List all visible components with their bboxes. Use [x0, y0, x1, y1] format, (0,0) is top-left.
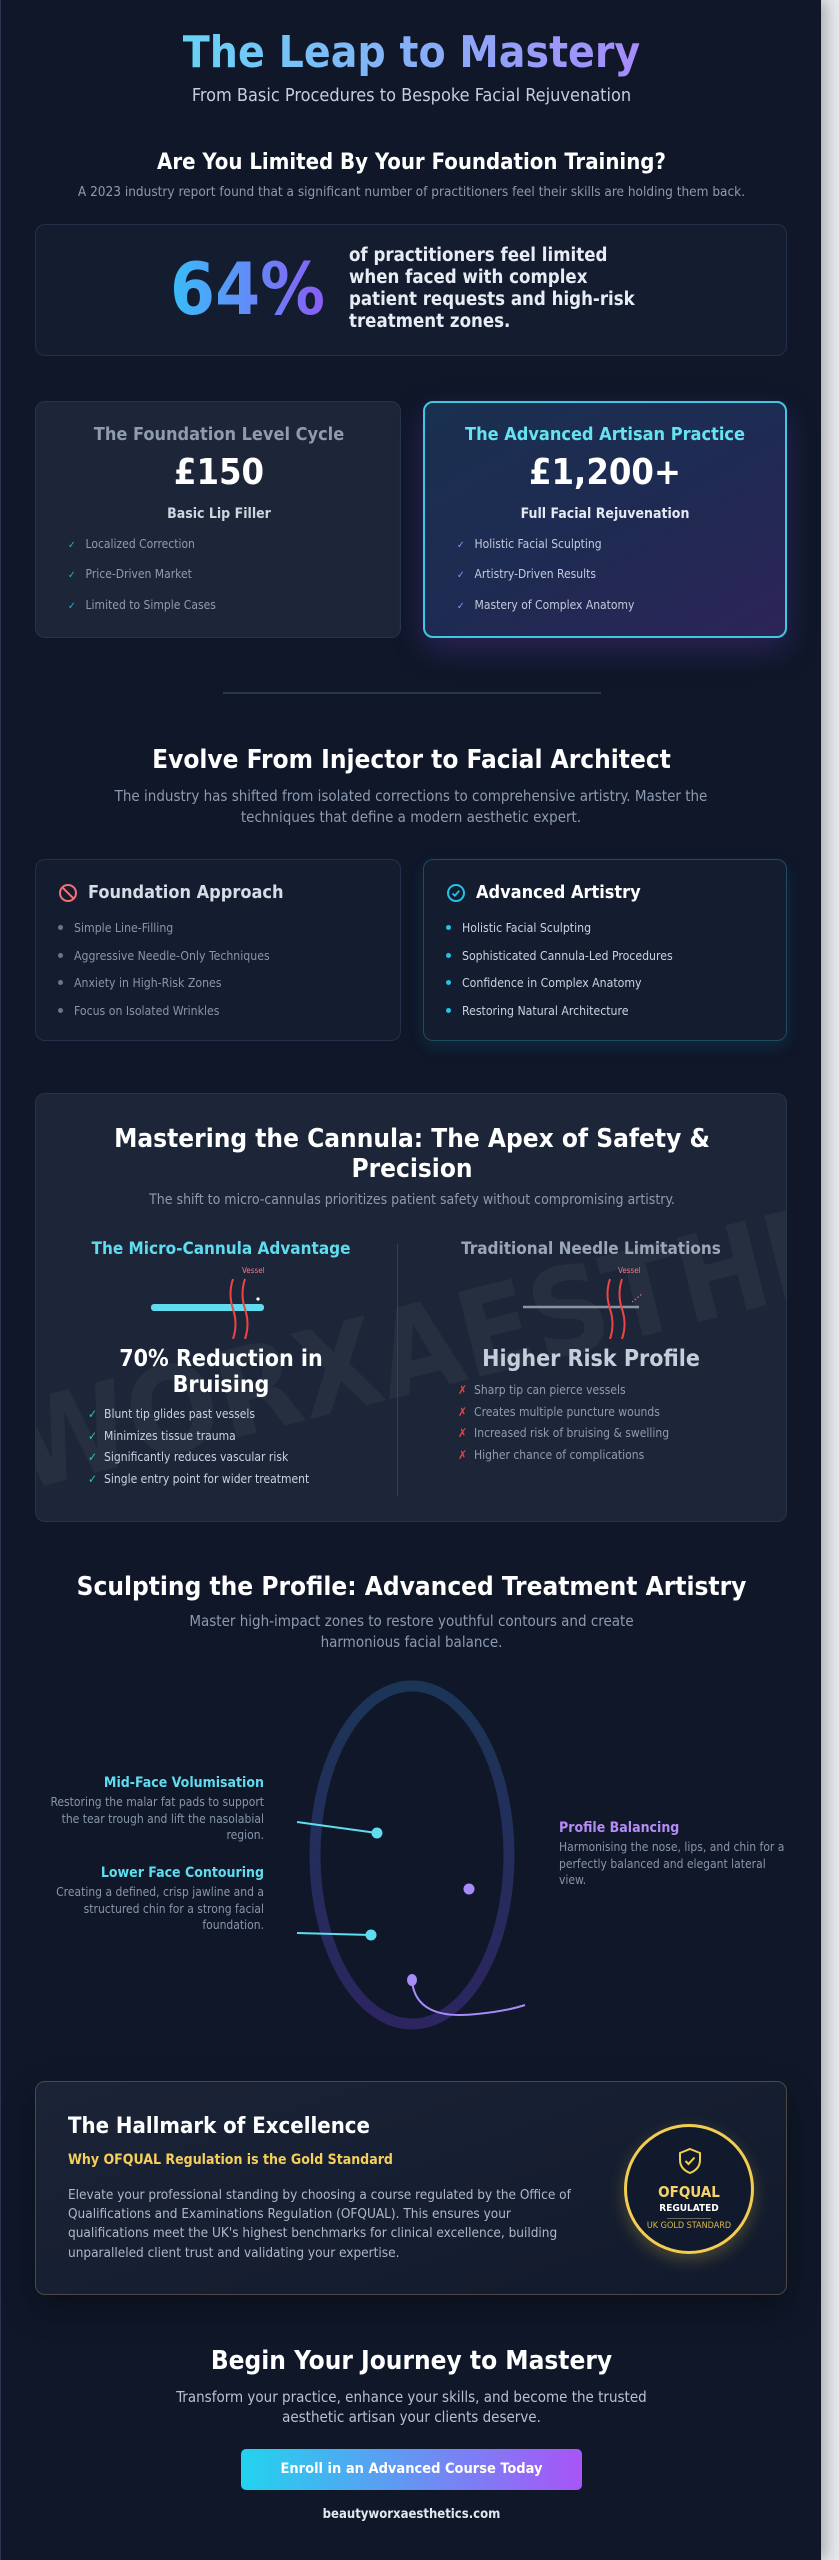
- panel: hallmark: [35, 2081, 787, 2295]
- list: [458, 1383, 669, 1462]
- card title: The Foundation Level Cycle: [94, 424, 344, 445]
- price: £150: [174, 452, 264, 493]
- stat: reduction: Bruising: [173, 1372, 269, 1398]
- column: micro-cannula advantage: [88, 1239, 350, 1486]
- footer url: beautyworxaesthetics.com: [323, 2507, 500, 2522]
- panel: 64% stat: [35, 224, 787, 356]
- card subtitle: Full Facial Rejuvenation: [521, 506, 689, 522]
- heading: evolve: Evolve From Injector to Facial Architect: [152, 745, 671, 775]
- diagram: needle: Vessel: [618, 1266, 641, 1275]
- diagram: face profile: [296, 1680, 526, 2030]
- list: ✗ Creates multiple puncture wounds: [458, 1405, 660, 1419]
- list: ✓ Single entry point for wider treatment: [88, 1472, 309, 1486]
- panel: advanced artisan card: [423, 401, 787, 638]
- heading: begin journey: Begin Your Journey to Mastery: [211, 2346, 612, 2376]
- label: mid-face: Restoring the malar fat pads to support the tear trough and lift the nasolabial region.: [50, 1795, 264, 1842]
- icon: shield: [679, 2148, 701, 2174]
- diagram: needle: [523, 1266, 642, 1339]
- list: ✓ Significantly reduces vascular risk: [88, 1450, 288, 1464]
- list: Simple Line-Filling: [74, 921, 173, 935]
- heading: The Hallmark of Excellence: [68, 2114, 370, 2139]
- list: Confidence in Complex Anatomy: [462, 976, 642, 990]
- text: sculpting sub: Master high-impact zones to restore youthful contours and create harmonious facial balance.: [189, 1612, 634, 1651]
- label: lower face: Creating a defined, crisp jawline and a structured chin for a strong facial foundation.: [56, 1885, 264, 1932]
- list: ✗ Increased risk of bruising & swelling: [458, 1426, 669, 1440]
- list: [68, 537, 216, 612]
- list: [457, 537, 634, 612]
- label: profile balancing: Harmonising the nose, lips, and chin for a perfectly balanced and elegant lateral view.: [559, 1840, 784, 1887]
- list: Aggressive Needle-Only Techniques: [74, 949, 270, 963]
- stat: higher risk: Higher Risk Profile: [482, 1346, 700, 1372]
- price: £1,200+: [529, 452, 681, 493]
- label: mid-face: Mid-Face Volumisation: [104, 1775, 264, 1791]
- text: cta sub: Transform your practice, enhance your skills, and become the trusted aesthetic artisan your clients deserve.: [176, 2388, 647, 2426]
- badge: OFQUAL: OFQUAL: [658, 2183, 720, 2201]
- heading with icon: Foundation Approach: [88, 882, 284, 903]
- heading: limited: Are You Limited By Your Foundation Training?: [157, 150, 666, 175]
- button: enroll: Enroll in an Advanced Course Today: [280, 2461, 543, 2477]
- diagram: cannula: Vessel: [242, 1266, 265, 1275]
- list: ✓ Artistry-Driven Results: [457, 567, 596, 581]
- panel: foundation level card: [35, 401, 401, 638]
- list: ✓ Localized Correction: [68, 537, 195, 551]
- list: ✓ Mastery of Complex Anatomy: [457, 598, 634, 612]
- column: needle limitations: [458, 1239, 721, 1462]
- stat text: when faced with complex: [349, 267, 587, 288]
- heading with icon: Advanced Artistry: [476, 882, 641, 903]
- list: ✗ Sharp tip can pierce vessels: [458, 1383, 626, 1397]
- icon: prohibited: [59, 884, 77, 902]
- subheading gold: Why OFQUAL Regulation is the Gold Standard: [68, 2152, 393, 2168]
- list: ✓ Blunt tip glides past vessels: [88, 1407, 255, 1421]
- list: ✓ Price-Driven Market: [68, 567, 192, 581]
- badge: OFQUAL: UK GOLD STANDARD: [647, 2221, 731, 2231]
- list: [88, 1407, 309, 1486]
- badge: OFQUAL: REGULATED: [659, 2203, 719, 2214]
- list: Focus on Isolated Wrinkles: [74, 1004, 219, 1018]
- stat text: patient requests and high-risk: [349, 289, 635, 310]
- panel: foundation approach: [35, 859, 401, 1041]
- list: ✗ Higher chance of complications: [458, 1448, 644, 1462]
- list: [58, 921, 270, 1018]
- stat: reduction: 70% Reduction in: [119, 1346, 323, 1372]
- button: enroll: [241, 2449, 582, 2490]
- heading: sculpting: Sculpting the Profile: Advanced Treatment Artistry: [77, 1572, 746, 1602]
- heading: Mastering the Cannula: The Apex of Safety & Precision: [114, 1124, 710, 1184]
- stat number: 64%: [170, 247, 325, 331]
- badge: OFQUAL: [624, 2124, 754, 2254]
- label: profile balancing: Profile Balancing: [559, 1820, 679, 1836]
- list: [446, 921, 673, 1018]
- list: Sophisticated Cannula-Led Procedures: [462, 949, 673, 963]
- stat text: treatment zones.: [349, 311, 510, 332]
- column heading: Traditional Needle Limitations: [461, 1239, 721, 1259]
- card title: The Advanced Artisan Practice: [465, 424, 745, 445]
- list: ✓ Limited to Simple Cases: [68, 598, 216, 612]
- column heading: The Micro-Cannula Advantage: [92, 1239, 350, 1259]
- list: Holistic Facial Sculpting: [462, 921, 591, 935]
- text: report: A 2023 industry report found that a significant number of practitioners feel their skills are holding them back.: [78, 184, 745, 200]
- list: Restoring Natural Architecture: [462, 1004, 628, 1018]
- stat: reduction: [119, 1346, 323, 1398]
- stat text: of practitioners feel limited: [349, 245, 607, 266]
- icon: check circle: [447, 884, 465, 902]
- label: lower face: Lower Face Contouring: [101, 1865, 264, 1881]
- list: Anxiety in High-Risk Zones: [74, 976, 221, 990]
- paragraph: Elevate your professional standing by choosing a course regulated by the Office of Qualifications and Examinations Regulation (OFQUAL). This ensures your qualifications meet the UK's highest benchmarks for clinical excellence, building unparalleled client trust and validating your expertise.: [68, 2187, 571, 2261]
- text: sub: The shift to micro-cannulas prioritizes patient safety without compromising artistry.: [149, 1192, 675, 1208]
- title: The Leap to Mastery: [183, 27, 640, 78]
- list: ✓ Minimizes tissue trauma: [88, 1429, 236, 1443]
- card subtitle: Basic Lip Filler: [167, 506, 271, 522]
- subtitle: From Basic Procedures to Bespoke Facial Rejuvenation: [192, 85, 631, 106]
- panel: advanced artistry: [423, 859, 787, 1041]
- list: ✓ Holistic Facial Sculpting: [457, 537, 602, 551]
- text: evolve sub: The industry has shifted from isolated corrections to comprehensive artistry. Master the techniques that define a modern aesthetic expert.: [115, 787, 707, 826]
- diagram: cannula: [151, 1266, 265, 1339]
- stat text: [349, 245, 635, 332]
